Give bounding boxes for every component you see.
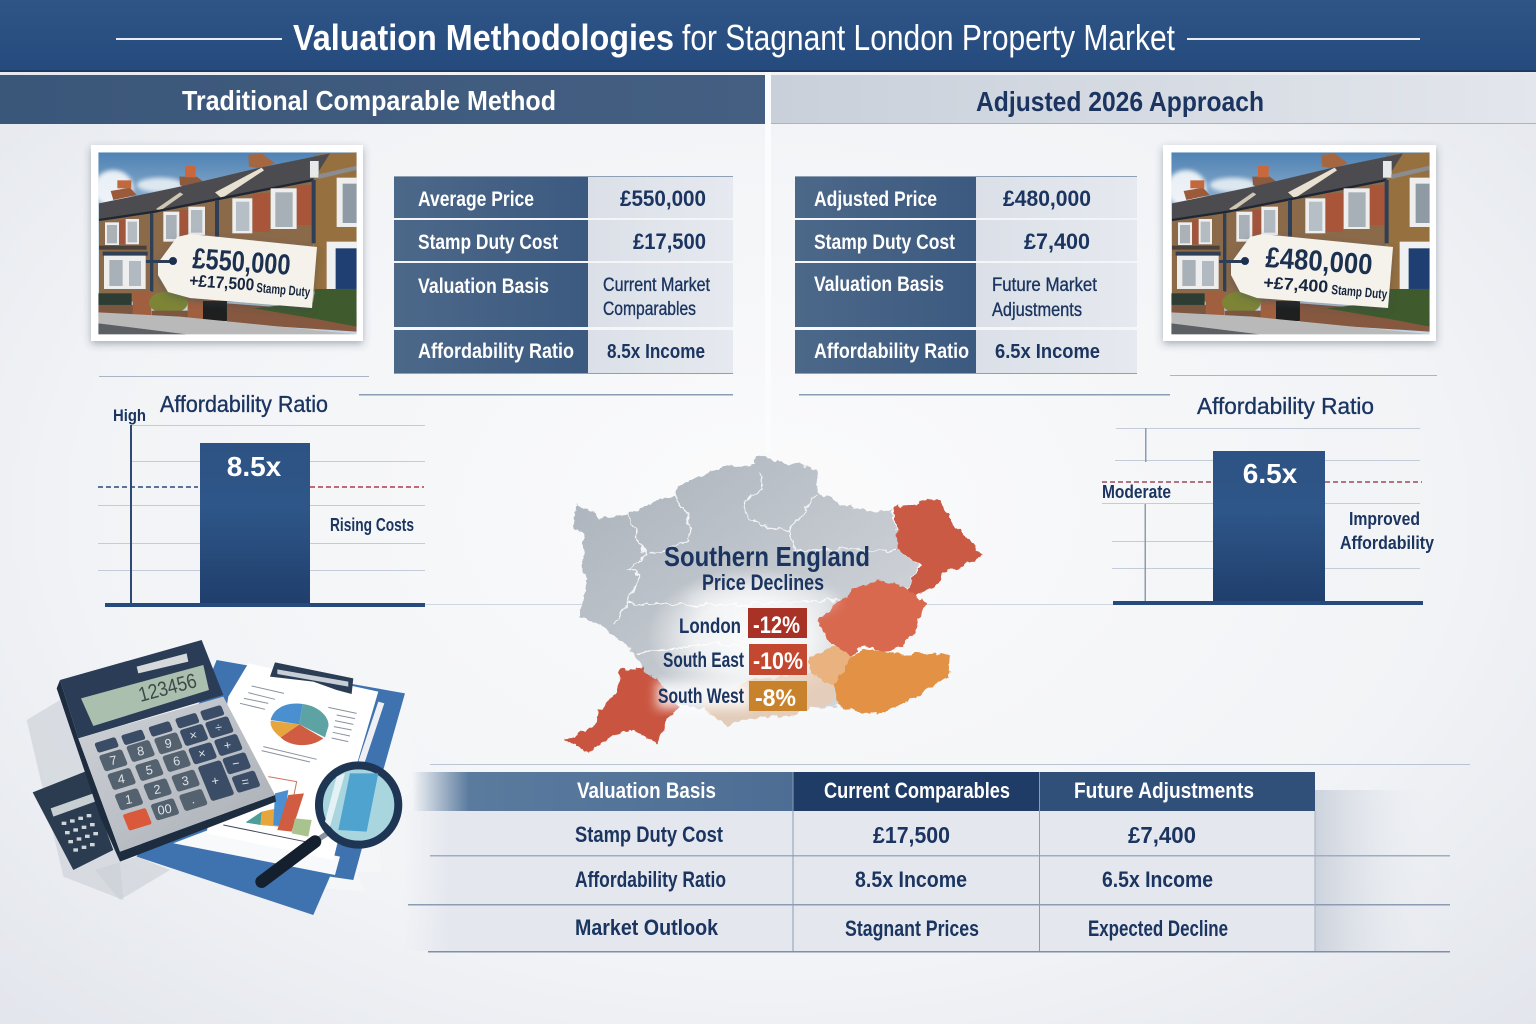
chart: affordability ratio adjusted: Improved — [1349, 509, 1420, 529]
map: southern england price declines: Price Declines — [702, 570, 824, 595]
table: adjusted approach figures — [795, 176, 1137, 374]
main calculator: 6 — [172, 754, 181, 769]
chart: affordability ratio adjusted: Affordability Ratio — [1197, 393, 1374, 419]
main calculator — [57, 640, 276, 862]
header row: Current Comparables — [824, 778, 1010, 803]
main calculator: 9 — [164, 736, 173, 751]
row: market outlook: Expected Decline — [1088, 916, 1228, 941]
title text: Valuation Methodologies — [293, 17, 674, 58]
illustration: calculator, clipboard and magnifier — [27, 640, 426, 915]
legend row: south west: -8% — [755, 685, 796, 712]
row: stamp duty cost: £7,400 — [1128, 822, 1196, 848]
price tag: +£7,400 — [1263, 273, 1329, 297]
table: adjusted approach figures: Adjustments — [992, 300, 1082, 321]
main calculator: + — [223, 738, 232, 753]
back sheets — [327, 702, 426, 892]
map: southern england price declines: Southern England — [664, 541, 870, 572]
chart: affordability ratio adjusted — [1102, 393, 1434, 605]
table: traditional method figures: 8.5x Income — [607, 341, 705, 363]
panel heading: traditional comparable method — [0, 75, 765, 124]
title banner — [0, 0, 1536, 72]
main calculator: × — [188, 728, 198, 743]
table: traditional method figures: £17,500 — [633, 229, 706, 254]
row: stamp duty cost — [575, 822, 1196, 848]
legend row: london: -12% — [753, 612, 800, 639]
price tag: £550,000 — [192, 243, 292, 282]
main calculator: 00 — [156, 802, 173, 818]
row: market outlook: Stagnant Prices — [845, 916, 979, 941]
bar chart — [223, 777, 313, 843]
table: adjusted approach figures: Affordability Ratio — [814, 340, 969, 363]
table: traditional method figures: Affordability Ratio — [418, 340, 574, 363]
bar 8.5x — [200, 443, 310, 605]
row: affordability ratio: Affordability Ratio — [575, 867, 726, 892]
main calculator: ÷ — [214, 720, 223, 735]
main calculator: 4 — [117, 772, 126, 787]
legend row: south west — [658, 681, 807, 712]
main calculator: + — [210, 774, 220, 789]
bar 8.5x: 8.5x — [227, 451, 282, 482]
table: adjusted approach figures: Adjusted Price — [814, 188, 937, 211]
row: market outlook — [575, 915, 1228, 941]
row: affordability ratio — [575, 867, 1213, 892]
table: adjusted approach figures: £480,000 — [1003, 186, 1091, 211]
folder — [137, 660, 405, 915]
chart: affordability ratio adjusted: Moderate — [1102, 482, 1171, 502]
row: stamp duty cost: Stamp Duty Cost — [575, 822, 724, 847]
row: affordability ratio: 8.5x Income — [855, 867, 967, 892]
chart: affordability ratio traditional: Rising Costs — [330, 515, 414, 535]
main calculator: × — [197, 746, 207, 761]
clipboard paper — [173, 662, 384, 875]
panel heading: adjusted 2026 approach — [771, 75, 1536, 124]
panel heading: adjusted 2026 approach: Adjusted 2026 Approach — [976, 86, 1264, 117]
table: traditional method figures: Stamp Duty Cost — [418, 231, 558, 254]
chart: affordability ratio traditional: Affordability Ratio — [160, 391, 328, 417]
legend row: south east: -10% — [753, 648, 803, 675]
row: market outlook: Market Outlook — [575, 915, 719, 940]
main calculator: 7 — [109, 753, 118, 768]
main calculator: 123456 — [136, 669, 199, 707]
price tag: Stamp Duty — [1331, 282, 1388, 302]
table: adjusted approach figures: 6.5x Income — [995, 341, 1100, 363]
main calculator: 8 — [136, 744, 145, 759]
main calculator: − — [231, 756, 241, 771]
table: adjusted approach figures: £7,400 — [1024, 229, 1090, 254]
magnifying glass — [262, 765, 398, 882]
main calculator: 2 — [153, 782, 162, 797]
main calculator: = — [240, 775, 250, 790]
main calculator: 1 — [124, 792, 133, 807]
legend row: south east: South East — [663, 649, 744, 672]
chart: affordability ratio traditional — [98, 391, 425, 607]
table: traditional method figures: Average Price — [418, 188, 534, 211]
table: traditional method figures: Valuation Basis — [418, 275, 549, 298]
chart: affordability ratio traditional: High — [113, 406, 146, 425]
bar 6.5x: 6.5x — [1243, 458, 1298, 489]
legend row: london — [679, 608, 807, 639]
table: adjusted approach figures: Future Market — [992, 275, 1098, 296]
chart: affordability ratio adjusted: Affordability — [1340, 533, 1434, 553]
header row: Future Adjustments — [1074, 778, 1254, 803]
table: traditional method figures: £550,000 — [620, 186, 706, 211]
panel heading: traditional comparable method: Traditional Comparable Method — [182, 85, 556, 116]
table: traditional method figures: Comparables — [603, 299, 696, 320]
price tag: Stamp Duty — [256, 280, 311, 300]
price tag: +£17,500 — [189, 271, 255, 295]
price tag — [1219, 234, 1393, 308]
table: adjusted approach figures: Valuation Basis — [814, 273, 944, 296]
legend row: london: London — [679, 615, 741, 638]
table: adjusted approach figures: Stamp Duty Cost — [814, 231, 955, 254]
main calculator: 5 — [145, 763, 154, 778]
legend row: south west: South West — [658, 685, 744, 708]
row: affordability ratio: 6.5x Income — [1102, 867, 1213, 892]
table: traditional method figures: Current Market — [603, 275, 711, 296]
header row — [577, 778, 1254, 803]
map: southern england price declines — [563, 455, 983, 752]
row: stamp duty cost: £17,500 — [873, 822, 950, 848]
pie chart — [271, 704, 328, 745]
price tag: £480,000 — [1265, 242, 1373, 281]
main calculator: 3 — [181, 774, 190, 789]
price tag — [146, 234, 317, 308]
small calculator — [33, 772, 113, 870]
table: traditional method figures — [394, 176, 733, 374]
legend row: south east — [663, 644, 807, 675]
photo: terraced houses with price tag 480,000 — [1163, 145, 1436, 341]
main calculator: . — [190, 792, 196, 807]
title text: for Stagnant London Property Market — [682, 17, 1175, 58]
comparison table — [404, 764, 1470, 952]
photo: terraced houses with price tag 550,000 — [91, 145, 363, 341]
bar 6.5x — [1213, 451, 1325, 604]
header row: Valuation Basis — [577, 778, 716, 803]
